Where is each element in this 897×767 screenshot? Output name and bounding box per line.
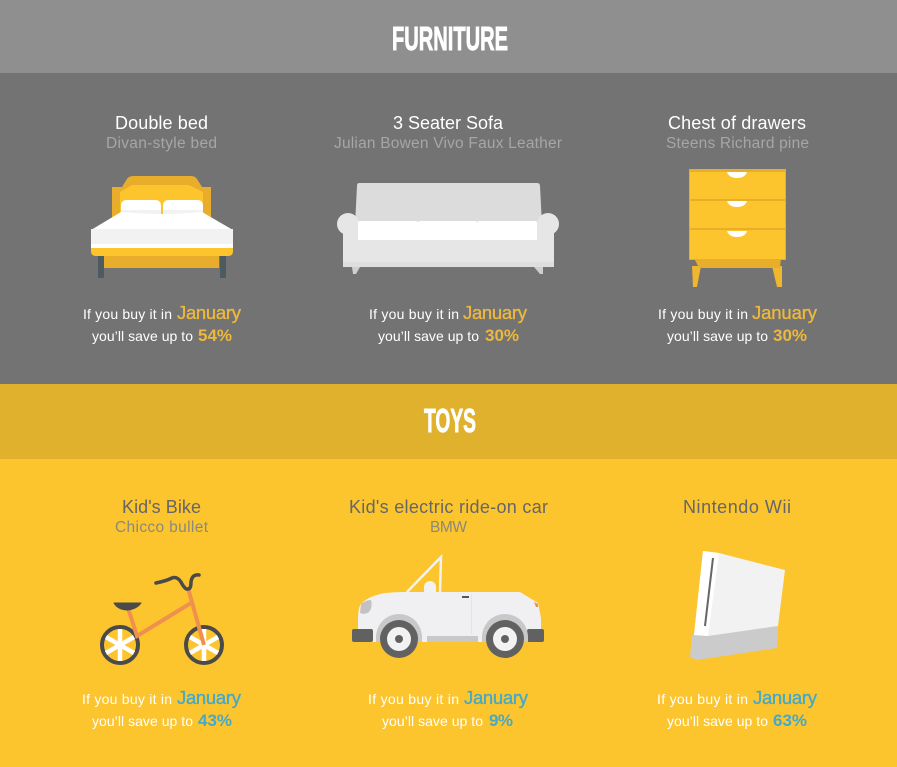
item: sofa bbox=[334, 113, 562, 345]
heading band: furniture bbox=[0, 0, 897, 73]
item subtitle: BMW bbox=[430, 519, 467, 536]
savings text: January bbox=[177, 302, 242, 323]
savings text: you’ll save up to bbox=[92, 328, 193, 344]
savings text: January bbox=[177, 687, 242, 708]
savings text: 30% bbox=[773, 326, 807, 345]
savings text: If you buy it in bbox=[83, 306, 172, 322]
item subtitle: Chicco bullet bbox=[115, 519, 209, 536]
savings text: you’ll save up to bbox=[378, 328, 479, 344]
heading band: toys bbox=[0, 384, 897, 459]
icon: sofa bbox=[337, 183, 559, 274]
savings text bbox=[82, 687, 242, 730]
icon: bed bbox=[91, 176, 233, 278]
icon: bike bbox=[102, 575, 222, 663]
savings text: you’ll save up to bbox=[667, 713, 768, 729]
item: chest of drawers bbox=[658, 113, 818, 345]
savings text bbox=[83, 302, 242, 345]
item: kid's bike bbox=[82, 497, 242, 730]
savings text: 30% bbox=[485, 326, 519, 345]
panel: toys bbox=[0, 384, 897, 767]
savings text: If you buy it in bbox=[658, 306, 748, 322]
savings text: January bbox=[463, 302, 528, 323]
icon: drawers bbox=[689, 169, 786, 287]
item subtitle: Julian Bowen Vivo Faux Leather bbox=[334, 135, 562, 152]
savings text: January bbox=[753, 687, 818, 708]
savings text: January bbox=[464, 687, 529, 708]
savings text bbox=[658, 302, 818, 345]
item title: Nintendo Wii bbox=[683, 497, 791, 517]
savings text: 43% bbox=[198, 711, 232, 730]
savings text: If you buy it in bbox=[369, 306, 459, 322]
savings text: 54% bbox=[198, 326, 232, 345]
savings text: January bbox=[752, 302, 818, 323]
heading band: toys: TOYS bbox=[424, 402, 476, 439]
icon: car bbox=[352, 557, 544, 658]
savings text: 63% bbox=[773, 711, 807, 730]
savings text bbox=[369, 302, 528, 345]
savings text: you’ll save up to bbox=[92, 713, 193, 729]
item subtitle: Steens Richard pine bbox=[666, 135, 809, 152]
savings text: you’ll save up to bbox=[667, 328, 768, 344]
item title: 3 Seater Sofa bbox=[393, 113, 504, 133]
item: nintendo wii bbox=[657, 497, 818, 730]
savings text bbox=[368, 687, 529, 730]
item title: Kid's electric ride-on car bbox=[349, 497, 548, 517]
savings text bbox=[657, 687, 818, 730]
panel: furniture bbox=[0, 0, 897, 384]
savings text: you’ll save up to bbox=[382, 713, 483, 729]
item title: Kid's Bike bbox=[122, 497, 201, 517]
savings text: If you buy it in bbox=[657, 691, 748, 707]
savings text: If you buy it in bbox=[82, 691, 172, 707]
icon: wii console bbox=[690, 551, 785, 660]
item subtitle: Divan-style bed bbox=[106, 135, 217, 152]
heading band: furniture: FURNITURE bbox=[392, 20, 508, 57]
item: electric car bbox=[349, 497, 548, 730]
item title: Chest of drawers bbox=[668, 113, 806, 133]
item title: Double bed bbox=[115, 113, 208, 133]
savings text: If you buy it in bbox=[368, 691, 459, 707]
savings text: 9% bbox=[489, 711, 513, 730]
item: double bed bbox=[83, 113, 242, 345]
